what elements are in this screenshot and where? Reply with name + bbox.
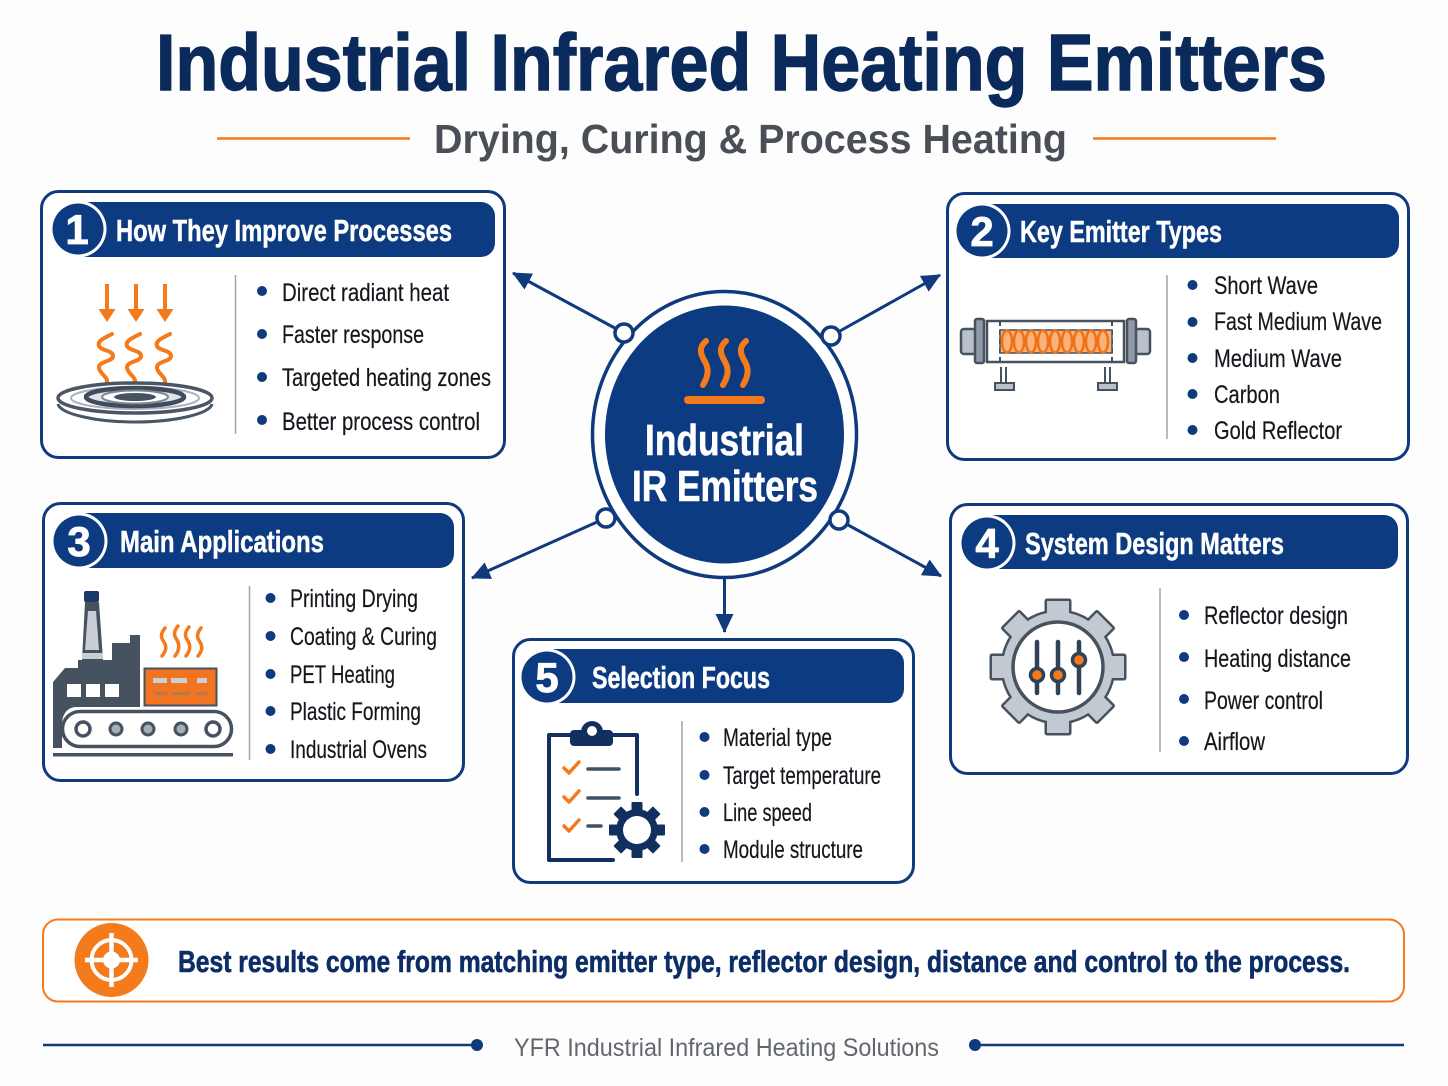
panel 2 bullet list: Short Wave xyxy=(1214,272,1318,300)
panel 5 header: Selection Focus xyxy=(592,660,770,695)
panel 2 bullet list: Medium Wave xyxy=(1214,345,1342,373)
panel 4 bullet list: Reflector design xyxy=(1204,602,1348,630)
panel 4 bullet list: Airflow xyxy=(1204,728,1266,756)
panel 1 bullet list xyxy=(257,279,491,436)
panel 3: Main Applications xyxy=(44,504,464,780)
central hub: Industrial IR Emitters xyxy=(592,292,856,578)
panel 4 header: 4 xyxy=(975,520,999,567)
panel 1 bullet list: Better process control xyxy=(282,408,480,436)
icon: checklist clipboard with gear xyxy=(549,721,665,860)
hub label xyxy=(632,416,818,511)
panel 4: System Design Matters xyxy=(950,504,1408,774)
panel 5 bullet list: Target temperature xyxy=(723,762,881,790)
callout banner: best results xyxy=(43,920,1404,1002)
panel 1 header: 1 xyxy=(65,206,89,253)
panel 5 bullet list xyxy=(700,724,881,864)
panel 1 bullet list: Faster response xyxy=(282,321,424,349)
panel 4 bullet list xyxy=(1179,602,1351,756)
panel 2 bullet list: Fast Medium Wave xyxy=(1214,308,1382,336)
panel 3 header: 3 xyxy=(67,518,91,565)
panel 3 bullet list: Coating & Curing xyxy=(290,623,437,651)
panel 3 header: Main Applications xyxy=(120,524,324,559)
icon: orange target xyxy=(74,923,148,997)
connector arrows from hub to panels xyxy=(472,273,941,632)
panel 5 bullet list: Line speed xyxy=(723,799,812,827)
icon: IR emitter tube xyxy=(961,319,1150,390)
panel 1 bullet list: Direct radiant heat xyxy=(282,279,449,307)
icon: gear with control sliders xyxy=(992,601,1124,733)
panel 2 bullet list xyxy=(1188,272,1382,445)
panel 2 header: Key Emitter Types xyxy=(1020,214,1222,249)
panel 2 bullet list: Carbon xyxy=(1214,381,1280,409)
icon: heat waves xyxy=(684,341,765,404)
hub label: IR Emitters xyxy=(632,462,818,511)
footer: YFR Industrial Infrared Heating Solutions xyxy=(514,1034,939,1062)
panel 5 bullet list: Module structure xyxy=(723,836,863,864)
panel 4 header: System Design Matters xyxy=(1025,526,1284,561)
icon: radiant heat on disc xyxy=(58,284,212,422)
panel 3 bullet list: Industrial Ovens xyxy=(290,736,427,764)
panel 1 bullet list: Targeted heating zones xyxy=(282,364,491,392)
panel 1: How They Improve Processes xyxy=(42,192,504,458)
footer xyxy=(43,1034,1404,1062)
connector nodes xyxy=(597,324,848,529)
panel 3 bullet list: Printing Drying xyxy=(290,585,418,613)
panel 5 header: 5 xyxy=(535,654,559,701)
icon: factory with conveyor oven xyxy=(53,591,233,756)
panel 2 header xyxy=(954,202,1399,260)
panel 3 bullet list: Plastic Forming xyxy=(290,698,421,726)
panel 5 bullet list: Material type xyxy=(723,724,832,752)
panel 3 header xyxy=(50,512,454,570)
panel 1 header: How They Improve Processes xyxy=(116,213,452,248)
panel 3 bullet list xyxy=(266,585,437,764)
panel 5 header xyxy=(518,648,904,706)
panel 3 bullet list: PET Heating xyxy=(290,661,395,689)
subtitle with orange rules: Drying, Curing & Process Heating xyxy=(434,116,1067,162)
panel 1 header xyxy=(50,200,495,258)
panel 2 header: 2 xyxy=(970,208,994,255)
panel 4 header xyxy=(958,514,1398,572)
hub label: Industrial xyxy=(645,416,804,465)
panel 5: Selection Focus xyxy=(514,640,914,882)
panel 4 bullet list: Heating distance xyxy=(1204,645,1351,673)
panel 2: Key Emitter Types xyxy=(948,194,1408,460)
panel 2 bullet list: Gold Reflector xyxy=(1214,417,1342,445)
panel 4 bullet list: Power control xyxy=(1204,687,1323,715)
